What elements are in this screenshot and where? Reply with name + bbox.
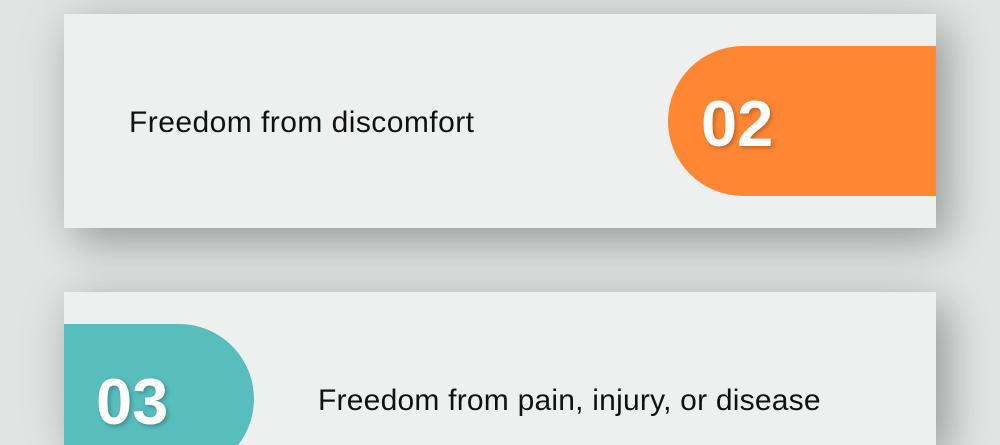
text: freedom from pain, injury, or disease: Freedom from pain, injury, or disease (318, 384, 821, 417)
number: 02: 02 (701, 87, 773, 160)
panel: freedom from discomfort card (64, 14, 936, 228)
panel: freedom from pain card (64, 292, 936, 445)
number: 03: 03 (96, 365, 168, 438)
number tab: 02 (668, 46, 936, 196)
text: freedom from discomfort: Freedom from discomfort (129, 106, 474, 139)
number tab: 03 (64, 324, 254, 445)
